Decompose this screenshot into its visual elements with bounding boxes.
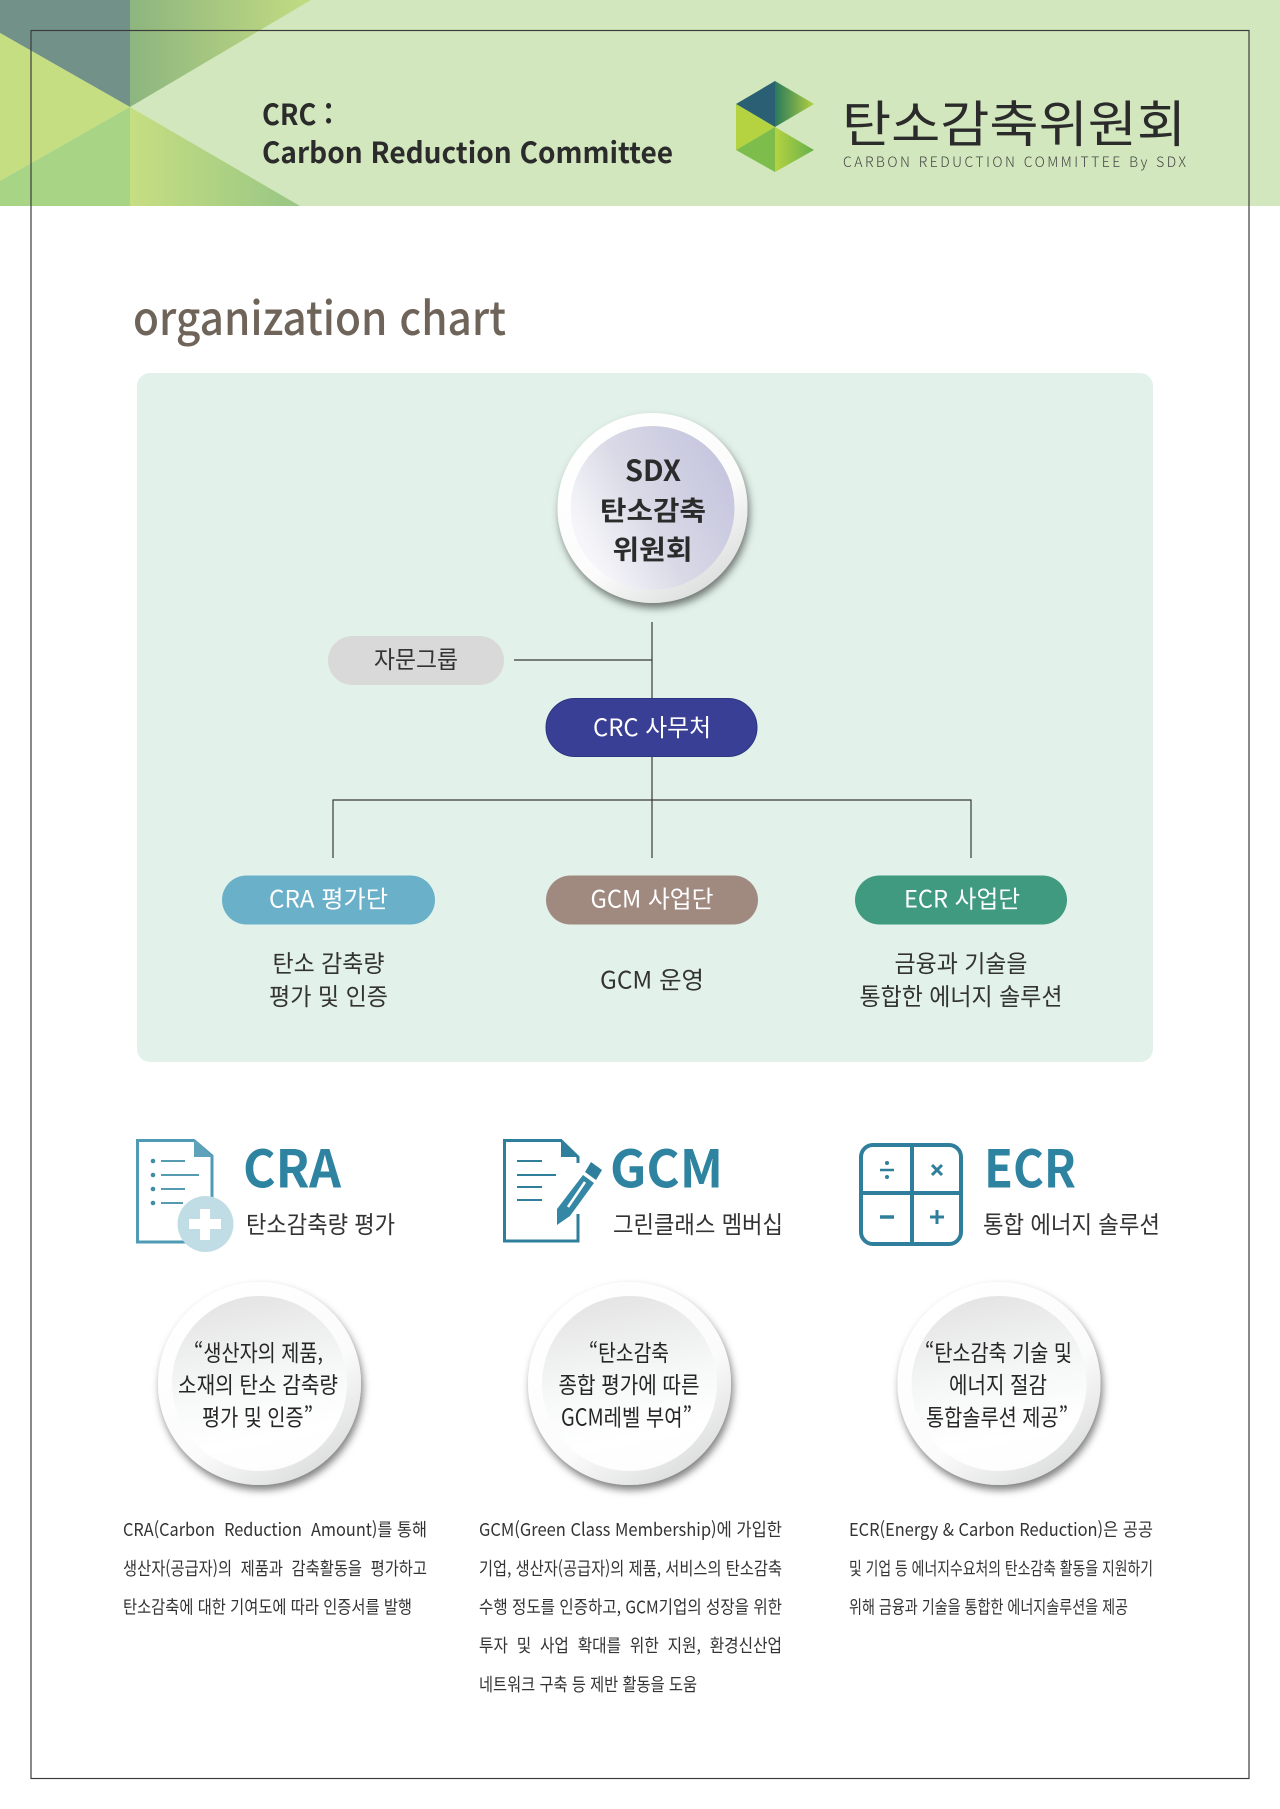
GCM quote circle: GCM레벨 부여”	[561, 1398, 692, 1432]
header title: Carbon Reduction Committee	[262, 130, 673, 172]
GCM subtitle: 그린클래스 멤버십	[613, 1205, 783, 1240]
ECR body text: 위해 금융과 기술을 통합한 에너지솔루션을 제공	[849, 1594, 1128, 1620]
node: GCM	[546, 876, 758, 924]
header band	[0, 0, 1280, 206]
ECR quote circle: “탄소감축 기술 및	[925, 1334, 1072, 1368]
section: CRA	[123, 1128, 427, 1620]
node: advisory group	[328, 636, 504, 685]
icon: document with plus	[138, 1139, 234, 1252]
ECR title: ECR	[984, 1128, 1076, 1202]
GCM body text: 네트워크 구축 등 제반 활동을 도움	[479, 1671, 697, 1697]
logo mark	[736, 81, 814, 172]
ECR body text	[849, 1516, 1153, 1620]
node: SDX committee: 탄소감축	[600, 490, 706, 528]
ECR body text: 및 기업 등 에너지수요처의 탄소감축 활동을 지원하기	[849, 1555, 1153, 1581]
ECR body text: ECR(Energy & Carbon Reduction)은 공공	[849, 1516, 1153, 1542]
node: ECR	[855, 876, 1067, 924]
header title	[262, 92, 673, 172]
GCM body text	[479, 1516, 782, 1697]
ECR quote circle	[898, 1282, 1100, 1485]
node: SDX committee: 위원회	[612, 528, 692, 568]
heading: organization chart: organization chart	[133, 283, 506, 349]
GCM title: GCM	[610, 1128, 723, 1202]
GCM body text: 투자 및 사업 확대를 위한 지원, 환경신산업	[479, 1632, 782, 1658]
panel: org chart	[137, 373, 1153, 1062]
logo wordmark: CARBON REDUCTION COMMITTEE By SDX	[843, 152, 1186, 172]
CRA quote circle: “생산자의 제품,	[194, 1334, 323, 1368]
header title: CRC :	[262, 92, 333, 134]
node: GCM: GCM 사업단	[590, 880, 714, 914]
header geometric triangles	[0, 0, 311, 206]
GCM body text: 수행 정도를 인증하고, GCM기업의 성장을 위한	[479, 1594, 782, 1620]
CRA description: 탄소 감축량	[272, 944, 384, 979]
node: ECR: ECR 사업단	[904, 880, 1020, 914]
GCM quote circle: 종합 평가에 따른	[558, 1366, 700, 1400]
CRA body text: 탄소감축에 대한 기여도에 따라 인증서를 발행	[123, 1594, 412, 1620]
connector lines	[333, 622, 971, 858]
ECR quote circle: 통합솔루션 제공”	[926, 1398, 1068, 1432]
GCM body text: GCM(Green Class Membership)에 가입한	[479, 1516, 782, 1542]
CRA body text: CRA(Carbon Reduction Amount)를 통해	[123, 1516, 427, 1542]
logo wordmark: 탄소감축위원회	[842, 85, 1186, 157]
node: advisory group: 자문그룹	[374, 640, 458, 675]
CRA quote circle	[158, 1282, 361, 1485]
ECR subtitle: 통합 에너지 솔루션	[983, 1205, 1160, 1240]
CRA quote circle: 평가 및 인증”	[202, 1398, 313, 1432]
section: GCM	[479, 1128, 783, 1697]
ECR description	[860, 944, 1062, 1012]
node: CRC secretariat: CRC 사무처	[593, 708, 711, 743]
CRA body text: 생산자(공급자)의 제품과 감축활동을 평가하고	[123, 1555, 427, 1581]
CRA description: 평가 및 인증	[269, 977, 388, 1012]
icon: document with pencil	[504, 1139, 602, 1241]
node: CRA	[222, 876, 435, 924]
CRA subtitle: 탄소감축량 평가	[246, 1205, 395, 1240]
CRA title: CRA	[243, 1128, 342, 1202]
GCM quote circle	[528, 1282, 731, 1485]
GCM description: GCM 운영	[600, 960, 704, 996]
CRA body text	[123, 1516, 427, 1620]
GCM quote circle: “탄소감축	[589, 1334, 669, 1368]
ECR quote circle: 에너지 절감	[949, 1366, 1047, 1400]
ECR description: 통합한 에너지 솔루션	[860, 977, 1062, 1012]
icon: calculator	[861, 1145, 961, 1244]
node: SDX committee	[558, 413, 748, 603]
node: CRC secretariat	[546, 698, 757, 756]
node: SDX committee: SDX	[625, 448, 681, 490]
section: ECR	[849, 1128, 1160, 1620]
CRA quote circle: 소재의 탄소 감축량	[178, 1366, 338, 1400]
GCM body text: 기업, 생산자(공급자)의 제품, 서비스의 탄소감축	[479, 1555, 782, 1581]
CRA description	[269, 944, 388, 1012]
ECR description: 금융과 기술을	[894, 944, 1028, 979]
node: CRA: CRA 평가단	[269, 880, 388, 914]
